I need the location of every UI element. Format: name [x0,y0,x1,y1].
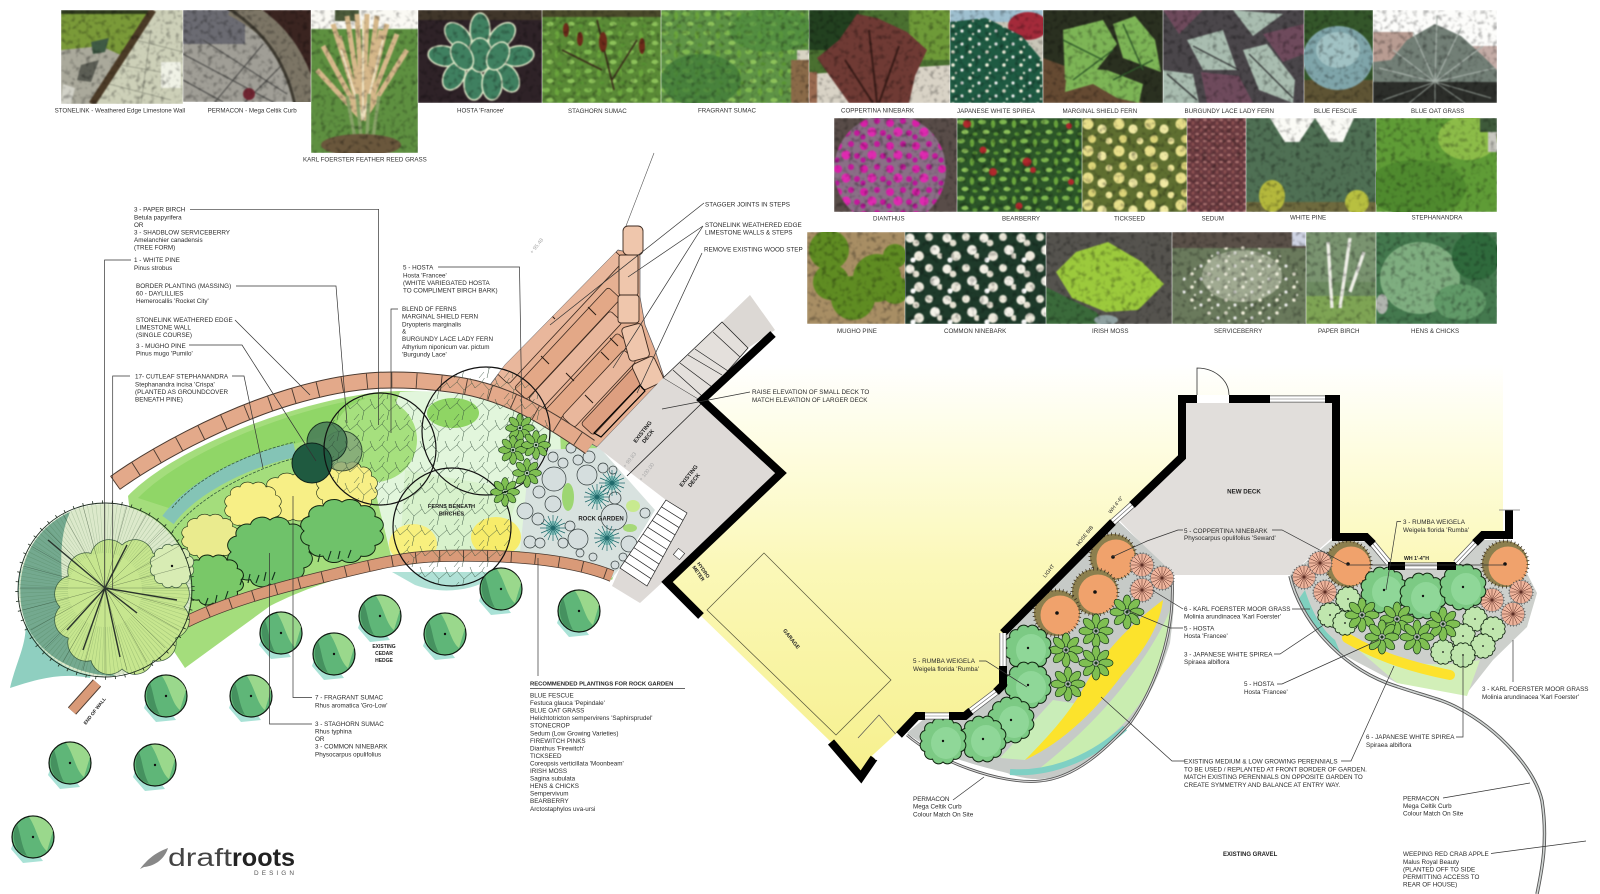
cedar hedge: CEDAR [375,651,393,657]
label: existing perennials: CREATE SYMMETRY AND BALANCE AT ENTRY WAY. [1184,782,1340,789]
photo captions: BLUE OAT GRASS [1411,108,1464,115]
label: steps notes: REMOVE EXISTING WOOD STEP [704,246,803,254]
photo captions: MUGHO PINE [837,328,877,335]
birch canopies [324,367,550,586]
label: mugho pine: Pinus mugo 'Pumilo' [136,350,193,358]
label: stonelink wall [136,317,233,339]
garage outline: GARAGE [781,628,801,651]
label: mugho pine [136,343,193,358]
label: rumba weigela right [1403,519,1469,534]
label: coppertina ninebark [1184,528,1276,542]
yellow shrubs [182,462,377,560]
label: existing perennials: MATCH EXISTING PERENNIALS ON OPPOSITE GARDEN TO [1184,774,1363,781]
birch canopies: FERNS BENEATH [428,504,475,510]
photo: staghorn sumac [542,10,661,103]
photo captions: COPPERTINA NINEBARK [841,108,915,114]
photo captions: DIANTHUS [873,216,905,222]
label: karl foerster right: Molinia arundinacea 'Karl Foerster' [1482,694,1579,701]
label: karl foerster right [1482,686,1588,701]
label: blend of ferns: Athyrium niponicum var. pictum [402,344,490,351]
label: japanese white spirea right: Spiraea albiflora [1366,742,1412,749]
label: permacon right [1403,796,1464,818]
rock garden plant list [530,682,685,813]
photo captions: STAGHORN SUMAC [568,108,627,115]
house walls: LIGHT [1042,563,1057,579]
label: paper birch: OR [134,222,144,229]
garage outline [707,553,899,738]
rock garden plant list: Arctostaphylos uva-ursi [530,806,595,813]
label: blend of ferns: & [402,329,407,336]
label: existing perennials: TO BE USED / REPLANTED AT FRONT BORDER OF GARDEN. [1184,766,1367,774]
logo: draftroots design: roots [232,844,295,872]
photo captions: IRISH MOSS [1092,328,1128,335]
label: paper birch: 3 - SHADBLOW SERVICEBERRY [134,230,231,236]
cedar hedge: EXISTING [372,644,396,650]
rock garden: ROCK GARDEN [578,516,624,522]
photo captions: JAPANESE WHITE SPIREA [957,108,1036,115]
photo: fragrant sumac [661,10,809,103]
label: japanese white spirea right: 6 - JAPANESE WHITE SPIREA [1366,734,1454,741]
label: permacon left: Colour Match On Site [913,812,974,818]
stone wall lower [186,556,612,622]
label: rumba weigela right: Weigela florida 'Rumba' [1403,527,1469,534]
rock garden [517,443,655,578]
photo: serviceberry [1172,232,1306,324]
photo: stephanandra [1376,118,1497,212]
green shrubs [183,499,383,605]
label: weeping red crab apple: PERMITTING ACCESS TO [1403,874,1479,881]
label: hosta left: Hosta 'Francee' [1184,633,1228,640]
label: cutleaf stephanandra: Stephanandra incisa 'Crispa' [135,382,215,388]
label: hosta: Hosta 'Francee' [403,272,447,280]
label: cutleaf stephanandra: 17- CUTLEAF STEPHANANDRA [135,374,228,380]
photo: japanese white spirea [950,10,1043,103]
label: permacon right: Mega Celtik Curb [1403,803,1452,810]
label: permacon left: PERMACON [913,796,949,803]
existing decks and stairs: METER [690,565,706,583]
label: paper birch: (TREE FORM) [134,244,175,252]
label: stonelink wall: STONELINK WEATHERED EDGE [136,317,233,324]
label: hosta: (WHITE VARIEGATED HOSTA [403,280,491,287]
label: blend of ferns: 'Burgundy Lace' [402,352,447,358]
label: staghorn sumac: 3 - STAGHORN SUMAC [315,721,384,728]
photo: marginal shield fern [1043,10,1163,103]
new deck: NEW DECK [1227,488,1261,496]
label: raise deck: MATCH ELEVATION OF LARGER DECK [752,397,868,404]
photo: stonelink wall [61,10,183,104]
label: paper birch [134,206,231,252]
hosta in left bed [491,414,550,506]
photo captions: MARGINAL SHIELD FERN [1062,108,1137,115]
existing decks and stairs: DECK [687,473,702,489]
label: blend of ferns: Dryopteris marginalis [402,321,461,328]
photo: tickseed [1082,118,1187,212]
label: white pine: 1 - WHITE PINE [134,257,180,264]
stone steps: + 95.48 [529,237,545,255]
label: paper birch: Amelanchier canadensis [134,237,203,244]
label: fragrant sumac [315,694,387,710]
house walls: WH 1'-4"H [1404,556,1429,562]
label: hosta right: Hosta 'Francee' [1244,689,1288,696]
label: karl foerster moor grass: 6 - KARL FOERSTER MOOR GRASS [1184,606,1290,613]
photo captions: COMMON NINEBARK [944,328,1007,335]
photo: hosta francee [418,10,542,103]
photo: dianthus [834,118,957,212]
mugho pines [292,422,362,483]
label: fragrant sumac: Rhus aromatica 'Gro-Low' [315,702,387,710]
photo: irish moss [1046,232,1172,324]
rock garden plant list: Coreopsis verticillata 'Moonbeam' [530,760,624,768]
house walls: HOSE BIB [1075,524,1095,548]
photo captions: STEPHANANDRA [1412,214,1463,222]
photo: white pine [1246,118,1376,212]
photo captions: HENS & CHICKS [1411,328,1459,335]
label: cutleaf stephanandra: (PLANTED AS GROUNDCOVER [135,389,229,396]
label: weeping red crab apple: Malus Royal Beauty [1403,859,1460,866]
label: coppertina ninebark: 5 - COPPERTINA NINEBARK [1184,528,1268,535]
photo captions: PAPER BIRCH [1318,328,1360,335]
planting bed: main [128,391,640,668]
photo captions: FRAGRANT SUMAC [698,108,757,115]
photo captions: HOSTA 'Francee' [457,108,504,115]
label: stonelink wall: (SINGLE COURSE) [136,332,192,339]
rock garden plant list: Sedum (Low Growing Varieties) [530,730,618,737]
label: white pine [134,257,180,272]
label: raise deck [752,389,869,404]
photo captions: TICKSEED [1114,216,1145,222]
leader lines [105,203,1586,854]
label: staghorn sumac: Physocarpus opulifolius [315,752,381,758]
existing decks and stairs: EXISTING [679,464,700,489]
end of wall: END OF WALL [83,696,108,726]
label: paper birch: 3 - PAPER BIRCH [134,206,185,214]
photo captions: BLUE FESCUE [1314,108,1357,115]
photo: coppertina ninebark [809,10,950,103]
photo: paper birch [1306,232,1376,324]
rock garden plant list: BLUE FESCUE [530,692,574,700]
label: hosta: 5 - HOSTA [403,264,433,272]
photo: hens and chicks [1376,232,1497,324]
label: staghorn sumac: 3 - COMMON NINEBARK [315,744,388,750]
rock garden plant list: STONECROP [530,723,570,730]
cedar hedge: HEDGE [375,658,394,664]
photo: karl foerster grass [311,10,418,153]
label: fragrant sumac: 7 - FRAGRANT SUMAC [315,694,383,702]
label: steps notes: STAGGER JOINTS IN STEPS [705,202,790,208]
label: raise deck: RAISE ELEVATION OF SMALL DECK TO [752,389,869,396]
rock garden plant list: RECOMMENDED PLANTINGS FOR ROCK GARDEN [530,682,673,688]
label: border planting: BORDER PLANTING (MASSING) [136,283,231,290]
label: staghorn sumac [315,721,388,758]
label: steps notes: STONELINK WEATHERED EDGE [705,222,802,229]
label: permacon right: PERMACON [1403,796,1439,802]
white pine canopy [17,502,194,678]
label: white pine: Pinus strobus [134,265,172,272]
label: border planting [136,283,231,305]
rock garden plant list: BLUE OAT GRASS [530,708,584,715]
label: hosta left: 5 - HOSTA [1184,626,1214,632]
label: permacon left: Mega Celtik Curb [913,804,962,810]
existing decks and stairs: DECK [641,429,656,445]
photo: mugho pine [807,232,905,324]
label: stonelink wall: LIMESTONE WALL [136,324,191,332]
label: hosta [403,264,498,294]
planting bed: entry right [1290,540,1537,696]
label: karl foerster moor grass [1184,606,1290,620]
photo captions: WHITE PINE [1290,214,1326,222]
label: hosta: TO COMPLIMENT BIRCH BARK) [403,288,498,294]
photo captions: KARL FOERSTER FEATHER REED GRASS [303,156,427,164]
label: cutleaf stephanandra [135,374,229,404]
label: japanese white spirea [1184,652,1273,666]
logo: draftroots design: draft [168,844,232,872]
rock garden plant list: TICKSEED [530,753,562,760]
rock garden plant list: HENS & CHICKS [530,783,579,790]
existing decks and stairs [597,295,781,603]
label: rumba weigela right: 3 - RUMBA WEIGELA [1403,519,1465,526]
photo: burgundy lace lady fern [1163,10,1304,103]
existing decks and stairs: + 99.83 [622,451,638,469]
rock garden plant list: Dianthus 'Firewitch' [530,745,584,752]
label: blend of ferns [402,306,494,358]
label: weeping red crab apple: REAR OF HOUSE) [1403,882,1457,888]
curb: right curve [1290,576,1545,894]
label: rumba weigela left: 5 - RUMBA WEIGELA [913,658,975,665]
photo: sedum [1187,118,1246,212]
photo: bearberry [957,118,1082,212]
photo: common ninebark [905,232,1046,324]
label: mugho pine: 3 - MUGHO PINE [136,343,186,350]
label: blend of ferns: MARGINAL SHIELD FERN [402,314,478,321]
label: existing gravel: EXISTING GRAVEL [1223,852,1278,858]
rock garden plant list: FIREWITCH PINKS [530,738,586,745]
house walls [667,334,1520,777]
label: staghorn sumac: Rhus typhina [315,728,352,736]
house walls: WH 4'-6" [1108,495,1125,515]
stone wall upper [115,380,590,483]
label: border planting: 60 - DAYLILLIES [136,290,184,298]
label: existing perennials [1184,758,1367,789]
label: permacon right: Colour Match On Site [1403,810,1464,818]
photo captions: PERMACON - Mega Celtik Curb [208,108,297,115]
label: japanese white spirea right [1366,734,1455,749]
photo captions: BEARBERRY [1002,216,1040,222]
rock garden plant list: IRISH MOSS [530,768,567,775]
photo captions [55,108,1464,335]
left teal wash [10,520,110,688]
birch canopies: BIRCHES [439,512,464,518]
label: staghorn sumac: OR [315,736,325,743]
label: karl foerster moor grass: Molinia arundinacea 'Karl Foerster' [1184,614,1281,620]
label: karl foerster right: 3 - KARL FOERSTER MOOR GRASS [1482,686,1588,693]
logo: draftroots design: DESIGN [254,870,294,877]
existing decks and stairs: + 100.00 [638,462,656,483]
new deck [1119,402,1333,575]
label: hosta left [1184,626,1228,640]
label: paper birch: Betula papyrifera [134,214,182,222]
photo: permacon curb [183,10,311,102]
photo captions: BURGUNDY LACE LADY FERN [1184,108,1274,115]
label: japanese white spirea: 3 - JAPANESE WHITE SPIREA [1184,652,1272,658]
label: hosta right [1244,681,1288,696]
label: weeping red crab apple: WEEPING RED CRAB APPLE [1403,851,1489,858]
label: blend of ferns: BURGUNDY LACE LADY FERN [402,336,494,343]
label: weeping red crab apple [1403,851,1489,888]
photo captions: STONELINK - Weathered Edge Limestone Wall [55,108,185,115]
label: weeping red crab apple: (PLANTED OFF TO SIDE [1403,866,1475,874]
label: existing perennials: EXISTING MEDIUM & LOW GROWING PERENNIALS [1184,758,1338,766]
label: blend of ferns: BLEND OF FERNS [402,306,457,313]
house footprint [667,364,1503,777]
photo: blue fescue [1304,10,1373,103]
label: coppertina ninebark: Physocarpus opulifolius 'Seward' [1184,535,1276,542]
label: rumba weigela left [913,658,979,673]
rock garden plant list: Sempervivum [530,791,568,798]
rock garden plant list: Sagina subulata [530,776,576,783]
stone steps [490,153,665,447]
label: rumba weigela left: Weigela florida 'Rumba' [913,666,979,673]
existing decks and stairs: HYDRO [695,561,710,580]
cedar hedge [11,568,600,863]
rock garden plant list: Festuca glauca 'Pepindale' [530,700,605,707]
label: cutleaf stephanandra: BENEATH PINE) [135,396,183,404]
end of wall [72,683,108,726]
photo captions: SERVICEBERRY [1214,328,1262,335]
logo: draftroots design [140,844,295,877]
label: hosta right: 5 - HOSTA [1244,681,1274,688]
label: steps notes: LIMESTONE WALLS & STEPS [705,230,792,236]
photo captions: SEDUM [1202,216,1224,222]
planting bed: entry left [907,520,1174,781]
label: steps notes [704,202,803,254]
rock garden plant list: Helichtotricton sempervirens 'Saphirsprudel' [530,715,652,722]
label: permacon left [913,796,974,818]
rock garden plant list: BEARBERRY [530,798,570,805]
label: border planting: Hemerocallis 'Rocket City' [136,298,209,305]
label: japanese white spirea: Spiraea albiflora [1184,659,1230,666]
photo: blue oat grass [1373,10,1497,103]
existing decks and stairs: EXISTING [633,420,654,445]
